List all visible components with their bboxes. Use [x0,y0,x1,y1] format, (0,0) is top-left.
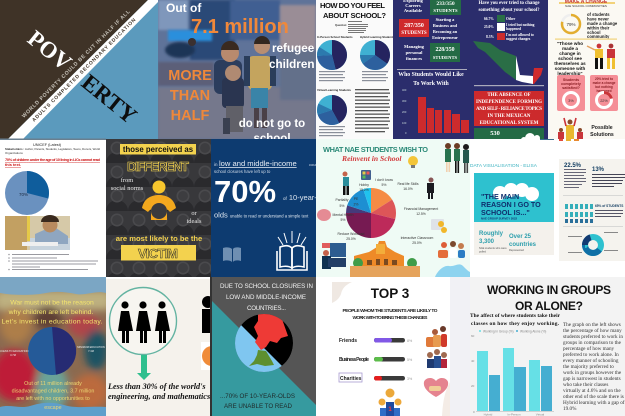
icon: games grid [361,170,371,180]
bar chart: 100 [402,121,407,125]
quote: leadership" [557,71,583,76]
pie labels: Real life Skills [397,182,419,186]
pie labels: Partiality [335,198,349,202]
card: main reason: Roughly [479,231,504,237]
heading: ERTY: ERTY [77,69,142,129]
legend: responses: I tried but nothing [506,23,535,27]
text: starting a business: Starting a [436,17,455,22]
panel: unicef document [0,138,106,277]
arrow down [137,355,151,380]
icon: school building [350,241,420,277]
text: possible solutions: Possible [591,125,613,131]
legend: responses: 8.3% [486,35,494,39]
subheading [342,308,438,321]
subheading: reinvent in school: Reinvent in School [341,154,402,163]
heading: have you tried to change: something about your school? [478,8,540,13]
heading [320,3,386,18]
icon: businessman [427,178,434,199]
text: due to school closures: DUE TO SCHOOL CLOSURES IN [220,283,313,290]
text block: other end of the scale there is [563,393,624,400]
stat box: 228/350: 228/350 [435,47,455,53]
text block: the majority preferred to [563,363,614,370]
pie labels: I don't know [375,178,394,182]
text: or ideals [187,210,202,225]
text block: percentage of how many [563,345,615,352]
text: starting a business: Entrepreneur [432,35,458,40]
row: business people: Business People [339,357,369,363]
pie chart [28,327,76,375]
card: main reason: Represented [509,248,524,252]
card: nothing happened: 22% [600,99,608,103]
card: completely satisfied: satisfied? [562,86,581,90]
card: nothing happened [590,75,618,111]
text block: 19.0% [563,406,577,412]
text: refugee children: children [269,58,314,71]
pie chart: virtual [317,95,347,125]
legend: responses: I'm not allowed to [506,33,534,37]
stat box: 530 students: 530 [490,130,500,137]
text: more than half: MORE [168,68,212,84]
text: less than 30 percent: engineering, and mathematics [108,392,210,401]
caption: world poverty line: WORLD POVERTY COULD BE CUT IN HALF IF ALL [21,9,132,119]
bar chart: 40 [471,359,475,363]
callout: absence of independence: IN THE MEXICAN [488,114,531,119]
card: main reason: countries [509,242,537,248]
text: careers available: Available [404,8,422,13]
pie chart: in-person [317,40,347,70]
quote: school see [558,56,582,61]
icon: small book [223,247,241,262]
panel: data visualisation [470,139,625,277]
watercolour backdrop [0,277,111,416]
photo: children [214,36,276,134]
subheading: The affect of where students take their [470,313,561,319]
text: war must not be the reason: Let's invest in education today. [2,318,103,326]
icon: student at computer [322,243,346,269]
icon: group cheering [558,118,583,140]
card: statistics [559,159,625,261]
icon: business people [427,349,447,368]
card: completely satisfied: 3% [568,99,574,103]
quote: made a [562,46,578,51]
text: from social norms: from [121,177,133,184]
stat box: 228/350: STUDENTS [433,55,458,60]
pie labels: 2% [354,202,358,206]
separator strip [210,277,212,416]
text block: work in groups however the [563,370,622,376]
callout: 70 percent statement: 70% of children under the age of 10 living in LICs cannot read [5,157,101,162]
icon: friends [426,326,447,347]
icon: trophy: 1 [388,407,392,413]
stat box: 287/350: STUDENTS [401,31,427,36]
callout: absence of independence [474,91,544,126]
heading: OR ALONE? [515,299,583,313]
card: main reason: polled [479,250,486,254]
card: main reason: NAE GROUP SURVEY 2022 [481,216,518,220]
pie chart: 70 percent: 70% [19,192,28,197]
bar chart: 300 [402,99,407,103]
bar chart [471,330,554,416]
text: less than 30 percent [107,382,210,401]
row: friends [339,338,413,344]
row: business people [339,357,413,363]
bar chart: 0 [405,131,407,135]
card: completely satisfied: Students [563,78,579,82]
text: refugee children [269,43,314,68]
question and legend: Question: [335,23,347,27]
heading: different: DIFFERENT [127,159,189,174]
heading: HOW DO YOU FEEL [320,1,385,10]
heading [487,283,611,313]
text block: gap is narrowest in students [563,376,621,382]
donut: 79 percent [562,15,580,33]
text: students made a change: within their [586,26,610,30]
bar chart: 60 [471,334,475,338]
heading: ABOUT SCHOOL? [323,11,386,20]
text: out of 11 million: disadvantaged children, 3.7 million [12,388,94,394]
bar chart: 200 [402,110,407,114]
heading: NAE SCHOOL COMMUNITIES [565,4,607,8]
card: main reason: SCHOOL IS..." [481,208,530,217]
divider [397,69,467,70]
card: main reason: Over 25 [509,234,532,240]
text: 70 percent unable to read: ...70% OF 10-YEAR-OLDS [220,393,295,400]
text: students made a change [586,12,618,39]
card: statistics: 65% of STUDENTS [595,204,623,208]
stat: 70 percent: 70% [214,174,276,209]
icon: open book with rays [277,231,307,270]
panel: poverty [0,0,158,140]
bullet list [8,254,98,270]
text: managing finances: finances [406,56,422,61]
text: students made a change: community [587,34,610,39]
photo backdrop [158,0,316,139]
subheading: classes on how they enjoy working. [471,321,560,327]
text: careers available: Careers [405,3,421,8]
legend: responses: 25.0% [484,25,494,29]
text: out of 11 million: Out of 11 million already [24,381,82,387]
icon: three students [445,143,469,173]
pie labels: Financial Management [404,207,438,211]
text: managing finances: personal [406,50,423,55]
text: students made a change: school [587,30,600,35]
text: out of 11 million [12,381,94,411]
text block [563,321,625,412]
pie labels: 16.0% [403,187,413,191]
chart labels: Hybrid Learning Students [360,35,395,39]
text: out of 11 million: escape [44,405,62,411]
heading: who students would like to work with [398,72,464,87]
heading [559,0,615,8]
pie labels: 5% [382,183,386,187]
row: charities: 3% [407,377,413,381]
legend rows [319,71,388,136]
legend: responses: suggest changes [506,37,531,41]
text block: preferred to work alone. In [563,351,619,358]
text: careers available [403,0,424,13]
panel: less than 30 percent [106,279,222,416]
panel: refugee children photo [158,0,316,145]
text: students made a change: of students [587,12,610,17]
card: nothing happened: 20% tried to [595,77,613,81]
quote: someone with [555,66,586,71]
text: low and middle income: countries [309,162,325,167]
subheading: PEOPLE WHOM THE STUDENTS ARE LIKELY TO [342,308,438,314]
text: or ideals: ideals [187,218,202,225]
card: main reason: 3,300 [479,239,495,245]
icon: person stretching [342,172,349,195]
text: low and middle income: in [214,162,218,167]
stat: 7.1 million: 7.1 million [191,16,289,38]
text: or ideals: or [191,210,198,217]
card: nothing happened: happened [596,89,612,93]
heading: WORKING IN GROUPS [487,283,611,297]
text: out of: Out of [166,1,202,15]
text: starting a business [432,17,458,40]
callout: 70 percent statement [5,157,101,167]
heading: who students would like to work with: To Work With [413,81,450,87]
text: war must not be the reason: why children are left behind. [8,309,93,316]
card: main reason [474,173,554,255]
text: low and middle income [214,159,325,168]
pie chart: hybrid [360,40,390,70]
panel: top 3 [316,277,470,416]
icon: lightbulb [408,156,418,168]
pie labels: 25.0% [346,237,356,241]
divider [474,85,544,86]
globe [230,313,293,380]
heading: WHAT NAE STUDENTS WISH TO [323,145,428,154]
card: completely satisfied: completely [561,82,582,86]
pie labels: Interactive Classroom [401,236,434,240]
legend: responses: happened [506,27,521,31]
text: stakeholders: Organizations [5,151,23,155]
quote: "Those who [557,41,583,46]
bar chart: Working Alone (%) [520,330,546,334]
pie labels [333,178,438,245]
panel: 70 percent navy [211,139,325,277]
bar chart: 400 [402,88,407,92]
text: do not go to school: do not go to [239,118,305,130]
row: charities [339,373,413,382]
text: war must not be the reason [2,300,103,326]
label: those perceived as: those perceived as [123,145,194,154]
pie labels: MINIMUM EDUCATION [77,345,105,349]
donut: 79 percent: 79% [566,22,576,27]
quote: change in [559,51,581,56]
panel: how do you feel about school [316,0,395,139]
text block: Hybrid learning with a gap of [563,399,625,406]
quote: themselves as [554,61,586,66]
text block: the percentage of how many [563,327,622,334]
row: charities: Charities [340,376,362,382]
callout: absence of independence: INDEPENDENCE FORMING [476,100,542,105]
card: main reason: "THE MAIN [481,192,519,201]
panel: make a change [548,0,625,140]
text: do not go to school [239,118,305,139]
callout: absence of independence: AND SELF - RELIANCE TOPICS [476,107,542,112]
pie labels: 5% [341,218,345,222]
card: nothing happened: make a change [593,81,616,85]
icon: wallet and coins [431,219,447,233]
stat box: 233/350: STUDENTS [433,8,458,13]
text: from social norms: social norms [111,185,144,192]
card: statistics: 13% [592,167,605,173]
panel: those perceived as different [106,139,211,277]
bar chart [402,88,469,135]
icon: trophy [378,388,402,416]
bar chart: 20 [471,384,475,388]
heading: have you tried to change: Have you ever tried to change [478,1,540,6]
heading: have you tried to change [478,1,540,13]
pie labels: Mental Health [333,213,354,217]
stat box: 287/350 [399,19,429,37]
text: more than half [169,70,212,120]
text block: every manner of schooling [563,357,619,364]
quote [554,41,586,76]
text block: virtually at 4.6% and on the [563,388,621,394]
pie chart: wishes [358,200,384,226]
text: starting a business: Becoming an [433,29,458,34]
text: less than 30 percent: Less than 30% of the world's [107,382,206,391]
text: possible solutions [590,125,614,138]
map: mexico [473,41,543,84]
photo: child writing [5,215,70,250]
text: students made a change: have never [587,16,609,22]
heading: DATA VISUALISATION - ELISA [470,163,538,169]
chart labels: Virtual Learning Students [317,88,351,92]
divider [555,38,617,40]
pie labels: Reduce Workload [338,232,365,236]
top strip [0,138,106,140]
callout: absence of independence: THE ABSENCE OF [487,93,531,98]
corner decoration right [442,382,450,416]
row: business people: 5% [407,358,413,362]
heading: TOP 3 [371,286,410,301]
bar chart: 0 [473,410,475,414]
text: most likely: are most likely to be the [116,234,202,243]
stat box: 287/350: 287/350 [404,23,424,29]
heading: POV: POV [23,25,77,76]
icon: charity heart [424,378,448,397]
text: due to school closures [220,283,313,312]
pie labels: 15.2% [359,188,369,192]
text: due to school closures: COUNTRIES... [247,305,286,312]
text: war must not be the reason: War must not be the reason [10,300,94,306]
icon: two people [587,44,615,69]
text: starting a business: Business and [433,23,458,28]
panel: navy career and independence panel [393,0,548,143]
icon: orange badge [201,342,222,370]
pie labels: 7.4M [88,349,94,353]
decoration: blue hills [435,264,470,277]
text block [355,89,390,132]
panel: school closures globe [212,277,316,416]
bar chart: Working in Group (%) [483,330,514,334]
text: more than half: THAN [170,88,210,104]
text: of 10-year: of 10-year- [283,193,317,202]
text block: students preferred to work in [563,333,623,340]
pie labels: 5% [340,204,344,208]
icon: yellow person [142,180,176,220]
pie labels: PE [354,197,359,201]
text: from social norms [111,177,144,192]
chart labels: In Person School Students [317,35,353,39]
text: managing finances: Managing [404,44,425,49]
subheading: WORK WITH TO BRING THESE CHANGES [352,315,428,321]
text: school closures: school closures have left up to [214,169,271,174]
text block: who take their classes [563,382,608,388]
stat box: 233/350: 233/350 [436,1,455,7]
text: do not go to school: school [253,133,291,145]
legend: responses [484,15,535,41]
icon: brain [317,209,331,221]
corner decoration [332,282,352,303]
card: completely satisfied [557,75,585,111]
top strip of squares [540,139,579,141]
card: main reason: REASON I GO TO [481,200,541,209]
text: refugee children: refugee [272,42,315,55]
chart labels [317,35,395,92]
legend: responses: Other [506,17,516,21]
pie labels: 3.7M [10,353,16,357]
text: due to school closures: LOW AND MIDDLE-INCOME [226,294,306,301]
stat box: 530 students: STUDENTS [483,138,508,143]
stat box: 228/350 [430,43,460,62]
pie labels: Hobby [359,183,369,187]
icon: group of students [438,241,465,258]
circle with three women [110,288,176,354]
heading: UNICEF (Latest) [33,143,62,147]
text: more than half: HALF [171,108,209,124]
text: stakeholders [5,147,100,155]
pie labels: 12.5% [416,212,426,216]
icon: cropped figure [202,296,214,333]
row: friends: Friends [339,338,357,344]
pie labels: 25.0% [412,241,422,245]
text: 70 percent unable to read: ARE UNABLE TO READ [224,403,293,410]
text: low and middle income: low and middle-income [219,159,297,168]
text: stakeholders: Stakeholders : Author, Parents, Students, Legislators, Teens, Donors, World [5,147,100,151]
panel: working in groups or alone [470,277,625,416]
card: nothing happened: but nothing [595,85,613,89]
stat box: 233/350 [430,0,461,15]
subheading [470,313,561,327]
text: 70 percent unable to read [220,393,295,410]
callout: 70 percent statement: this text. [5,162,21,167]
text: students made a change: made a change [587,21,618,26]
legend: responses: 66.7% [484,17,494,21]
label: victim: VICTIM [138,246,178,261]
card: main reason: NAE students who were [479,246,507,250]
text: managing finances [404,45,424,60]
callout: absence of independence: EDUCATIONAL SYSTEM [480,121,539,126]
card: statistics: 22.5% [564,163,582,169]
text: olds unable to read: olds unable to read or understand a simple text [214,210,309,220]
text: possible solutions: Solutions [590,132,614,138]
heading: who students would like to work with: Who Students Would Like [398,72,464,78]
panel: what nae students wish [316,139,470,277]
pie labels [0,345,105,357]
stat box: 530 students [474,128,544,139]
text block: The graph on the left shows [563,321,621,328]
row: friends: 8% [407,339,413,343]
caption: adults line on band: ADULTS COMPLETED SECONDARY EDUCATION [31,17,138,123]
panel: war must not be the reason [0,277,111,416]
text block: groups in comparison to the [563,340,622,346]
text: out of 11 million: are left with no opportunities to [16,396,90,402]
